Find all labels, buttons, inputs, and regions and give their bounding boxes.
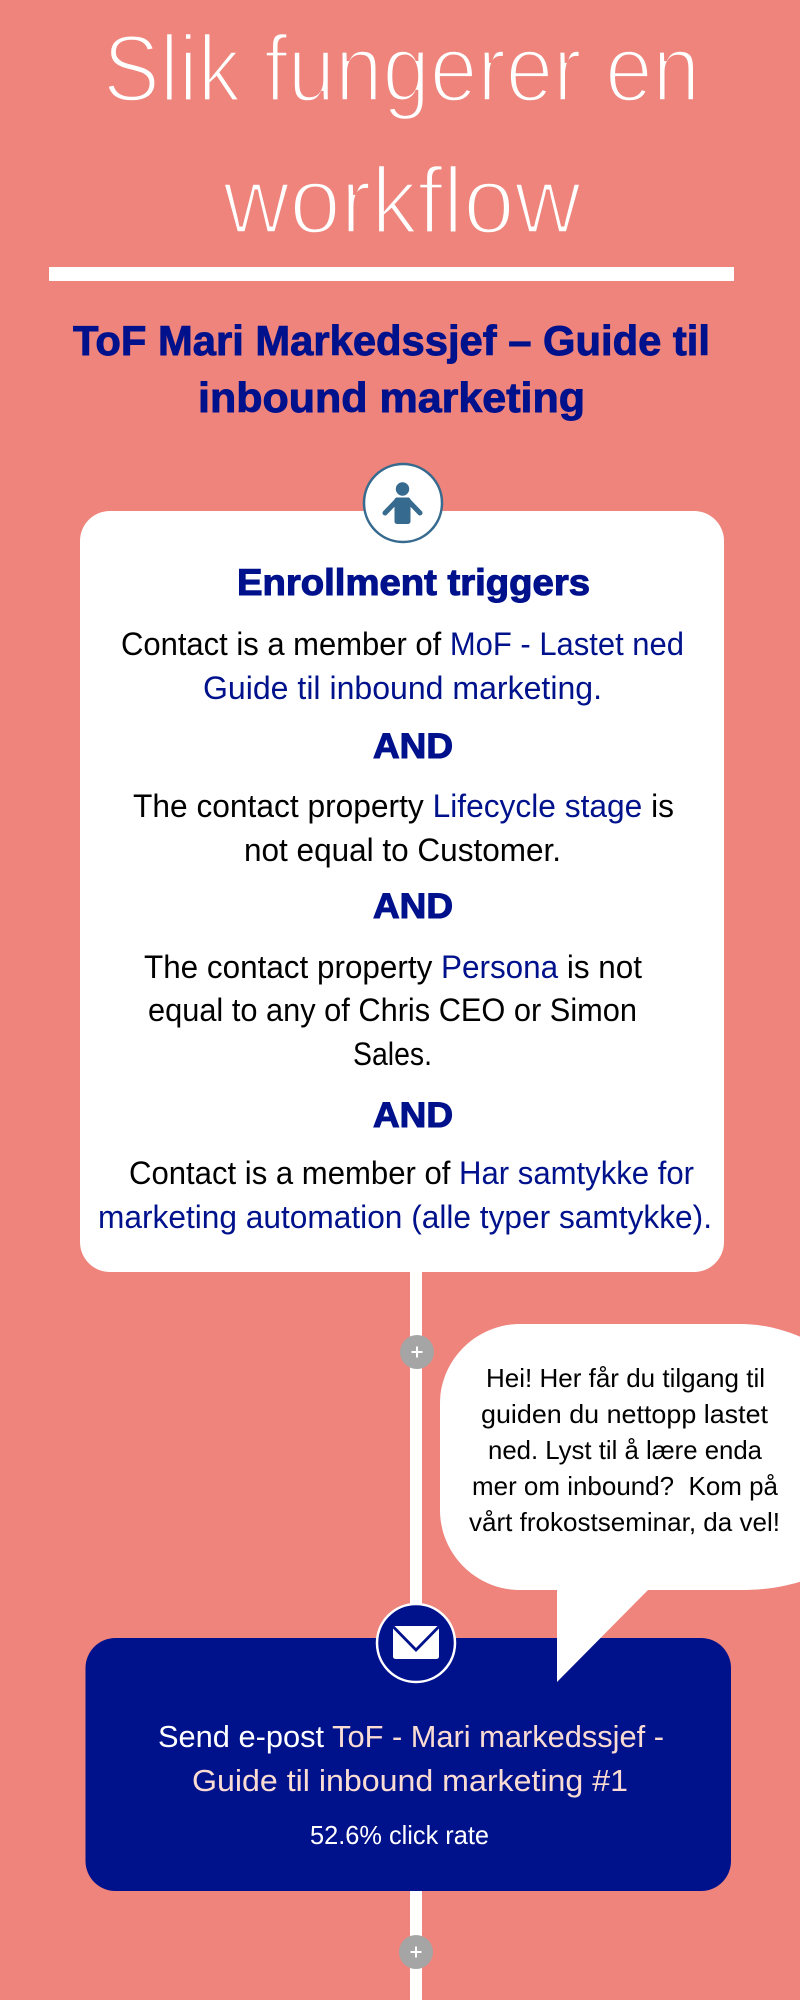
icon: person — [364, 464, 442, 542]
title — [103, 16, 700, 254]
callout: speech bubble — [440, 1324, 800, 1682]
condition 4: marketing automation (alle typer samtykke). — [98, 1199, 712, 1235]
condition 4: Contact is a member of Har samtykke for — [129, 1155, 694, 1191]
panel: send email — [86, 1638, 731, 1891]
callout text: Hei! Her får du tilgang til — [486, 1363, 765, 1393]
email name: Send e-post ToF - Mari markedssjef - — [158, 1719, 664, 1754]
title underline bar — [49, 267, 734, 281]
email name — [158, 1719, 664, 1798]
callout text: guiden du nettopp lastet — [481, 1399, 769, 1429]
callout text — [469, 1363, 780, 1537]
title: Slik fungerer en — [103, 16, 700, 122]
connector line: below email card — [410, 1885, 422, 2000]
AND label 1: AND — [373, 727, 453, 766]
click rate: 52.6% click rate — [310, 1820, 489, 1850]
AND label 2: AND — [373, 887, 453, 926]
panel: enrollment triggers — [80, 511, 724, 1272]
icon: envelope — [377, 1604, 455, 1682]
condition 1 — [121, 626, 684, 706]
subtitle: ToF Mari Markedssjef – Guide til — [73, 317, 710, 364]
plus button 1 — [400, 1335, 434, 1369]
email name: Guide til inbound marketing #1 — [192, 1763, 628, 1798]
plus button 2 — [399, 1935, 433, 1969]
condition 3: The contact property Persona is not — [144, 949, 642, 985]
callout text: mer om inbound? Kom på — [472, 1471, 779, 1501]
condition 3: Sales. — [353, 1036, 432, 1072]
AND label 3: AND — [373, 1096, 453, 1135]
condition 1: Guide til inbound marketing. — [203, 670, 602, 706]
callout text: vårt frokostseminar, da vel! — [469, 1507, 780, 1537]
callout text: ned. Lyst til å lære enda — [488, 1435, 763, 1465]
condition 4 — [98, 1155, 712, 1235]
condition 3 — [144, 949, 642, 1072]
title: workflow — [222, 148, 581, 254]
connector line: trigger card to email card — [410, 1265, 422, 1610]
subtitle — [73, 317, 710, 421]
condition 2: The contact property Lifecycle stage is — [133, 788, 674, 824]
condition 2: not equal to Customer. — [244, 832, 561, 868]
condition 2 — [133, 788, 674, 868]
subtitle: inbound marketing — [198, 374, 585, 421]
condition 1: Contact is a member of MoF - Lastet ned — [121, 626, 684, 662]
condition 3: equal to any of Chris CEO or Simon — [148, 992, 637, 1028]
heading: enrollment triggers: Enrollment triggers — [237, 562, 590, 603]
